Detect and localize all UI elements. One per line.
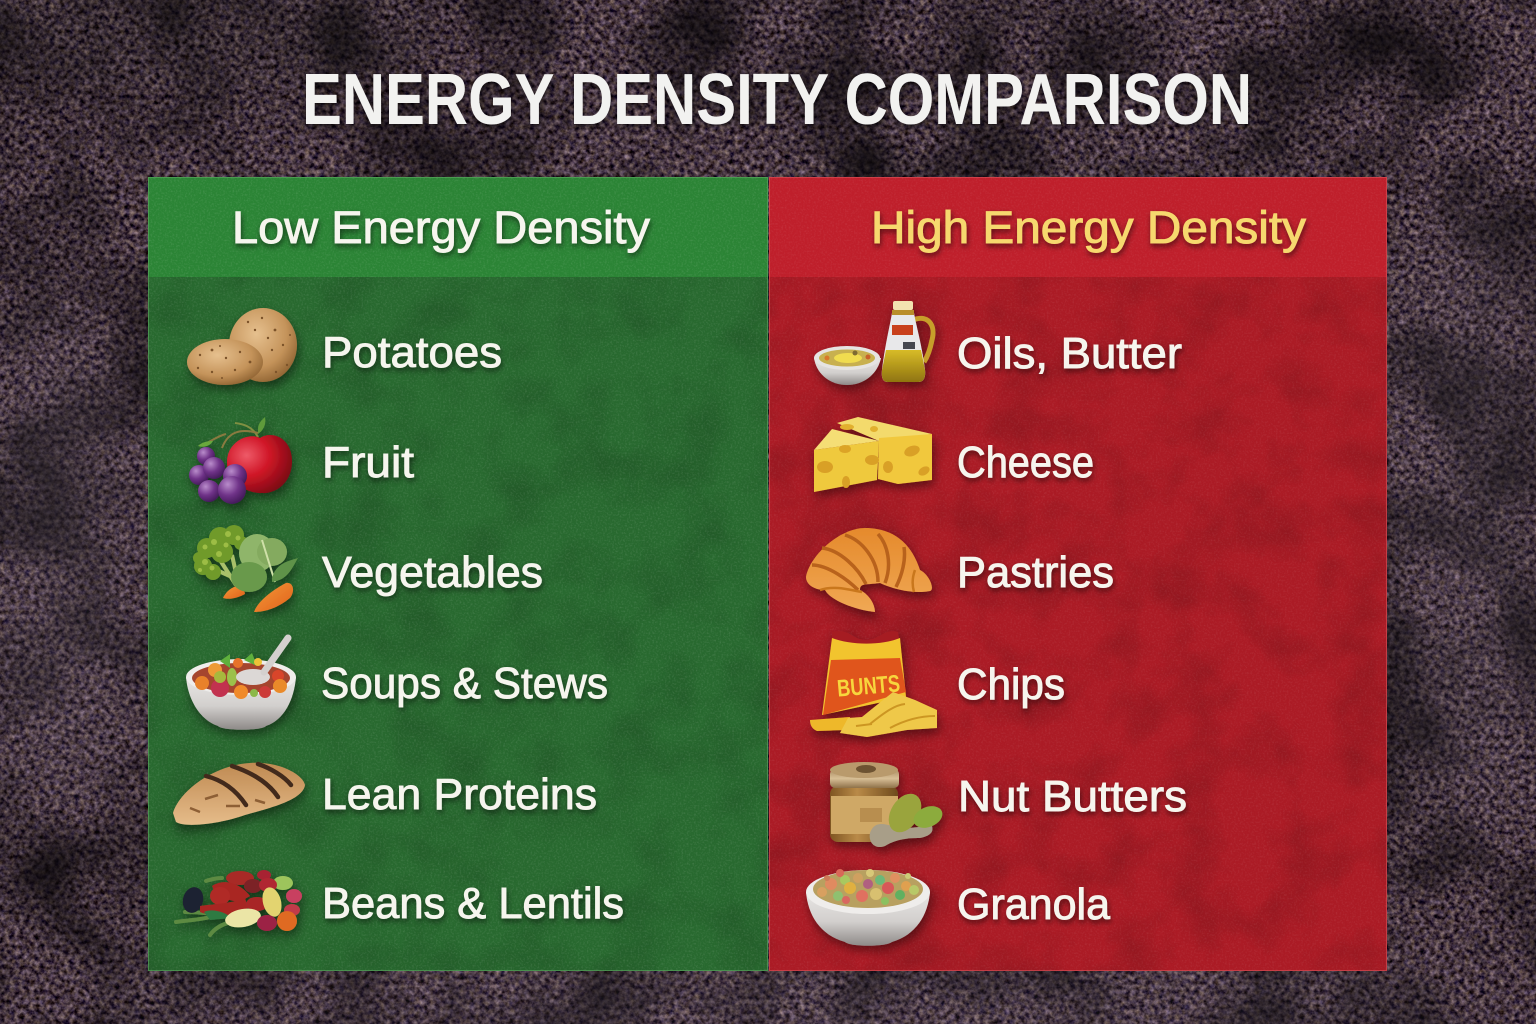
label: granola: Granola <box>957 880 1111 929</box>
icon: croissant <box>806 528 932 612</box>
label: beans and lentils: Beans & Lentils <box>322 879 624 928</box>
icon: chips bag: BUNTS <box>836 670 901 703</box>
icon: lean protein chicken <box>173 763 305 825</box>
label: lean proteins: Lean Proteins <box>322 770 597 819</box>
panel: high energy density <box>769 177 1387 971</box>
label: potatoes: Potatoes <box>322 328 502 377</box>
heading: high energy density: High Energy Density <box>871 202 1307 253</box>
icon: beans and lentils <box>176 870 302 935</box>
icon: soup bowl <box>186 638 296 730</box>
label: pastries: Pastries <box>957 548 1114 597</box>
icon: vegetables <box>193 525 298 612</box>
icon: chips bag <box>810 631 937 737</box>
icon: fruit <box>189 417 292 504</box>
icon: potatoes <box>187 308 297 385</box>
heading: low energy density: Low Energy Density <box>232 202 651 253</box>
label: chips: Chips <box>957 660 1065 709</box>
panel: low energy density <box>148 177 768 971</box>
icon: oils and butter <box>814 301 933 385</box>
icon: nut butter jar <box>830 762 946 847</box>
icon: granola bowl <box>806 869 930 946</box>
label: nut butters: Nut Butters <box>958 772 1187 821</box>
label: fruit: Fruit <box>322 438 414 487</box>
label: cheese: Cheese <box>957 438 1094 487</box>
label: oils and butter: Oils, Butter <box>957 329 1182 378</box>
title: ENERGY DENSITY COMPARISON <box>302 60 1252 140</box>
icon: cheese <box>814 417 932 492</box>
label: soups and stews: Soups & Stews <box>321 659 608 708</box>
label: vegetables: Vegetables <box>322 548 543 597</box>
